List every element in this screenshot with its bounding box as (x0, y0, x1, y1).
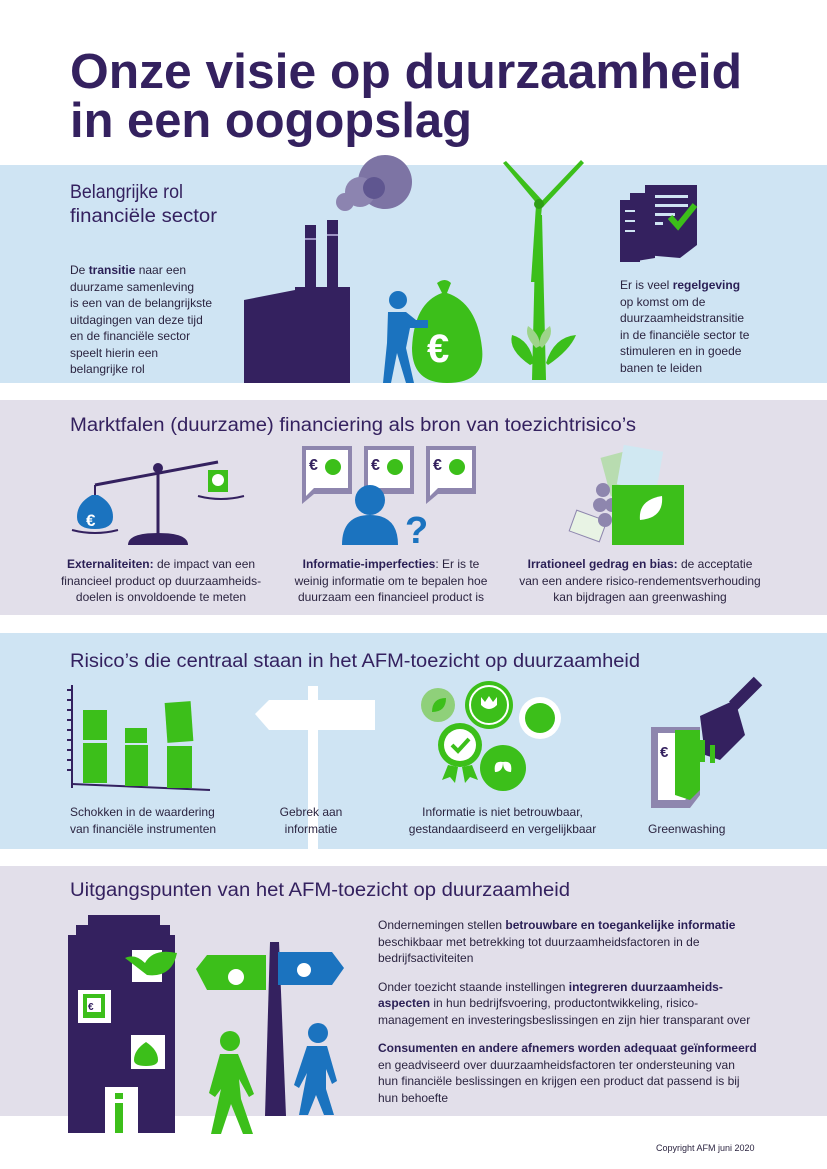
caption: irrationeel gedrag: Irrationeel gedrag en bias: de acceptatie (528, 557, 752, 571)
heading: section 1 (70, 182, 218, 227)
icon: greenwashing brush (651, 677, 762, 808)
heading: section 2: Marktfalen (duurzame) financiering als bron van toezichtrisico’s (70, 415, 636, 436)
title: in een oogopslag (70, 94, 472, 148)
text: section 4 principles: Ondernemingen stellen betrouwbare en toegankelijke informatie (378, 918, 735, 932)
caption: greenwashing: Greenwashing (648, 822, 725, 836)
icon: person pushing money bag (383, 280, 482, 383)
text: section 4 principles: Consumenten en andere afnemers worden adequaat geïnformeerd (378, 1041, 757, 1055)
icon: blank signpost (255, 686, 375, 849)
icon: greenwashing brush: € (660, 744, 669, 761)
icon: factory with smoke (244, 155, 412, 383)
band: section 2 background (0, 400, 827, 615)
icon: balance scale: € (86, 511, 96, 530)
text: section 4 principles: aspecten in hun bedrijfsvoering, productontwikkeling, risico- (378, 996, 698, 1010)
caption: schokken: van financiële instrumenten (70, 822, 216, 836)
band: section 1 background (0, 165, 827, 383)
text: section 1 left: en de financiële sector (70, 329, 190, 343)
caption: irrationeel gedrag: kan bijdragen aan greenwashing (553, 590, 727, 604)
text: section 4 principles: bedrijfsactiviteiten (378, 951, 473, 965)
caption: gebrek aan informatie: Gebrek aan (280, 805, 342, 819)
caption: informatie-imperfecties (294, 557, 487, 604)
caption: informatie-imperfecties: duurzaam een financieel product is (298, 590, 484, 604)
band: section 3 background (0, 633, 827, 849)
text: section 1 left: De transitie naar een (70, 263, 186, 277)
caption: irrationeel gedrag (519, 557, 761, 604)
text: section 1 left: speelt hierin een (70, 346, 158, 360)
text: section 4 principles: hun financiële beslissingen en krijgen een product dat passend is bij (378, 1074, 740, 1088)
title: Onze visie op duurzaamheid (70, 45, 742, 99)
icon: regulation documents with check (620, 185, 697, 262)
icon: wind turbine with plant (503, 160, 584, 380)
text: section 1 left: uitdagingen van deze tijd (70, 312, 203, 326)
text: section 1 left: duurzame samenleving (70, 280, 194, 294)
text: section 1 right: duurzaamheidstransitie (620, 311, 744, 325)
text: section 1 right: banen te leiden (620, 360, 702, 374)
icon: sustainability badges (421, 681, 561, 791)
text: section 4 principles: Onder toezicht staande instellingen integreren duurzaamheids- (378, 980, 723, 994)
text: section 1 right: in de financiële sector te (620, 328, 749, 342)
band: section 4 background (0, 866, 827, 1116)
text: section 4 principles: en geadviseerd over duurzaamheidsfactoren ter ondersteuning van (378, 1058, 735, 1072)
caption: externaliteiten (61, 557, 261, 604)
text: section 1 right: op komst om de (620, 294, 705, 308)
caption: irrationeel gedrag: van een andere risico-rendementsverhouding (519, 574, 761, 588)
icon: building with icons: € (88, 1002, 94, 1013)
icon: building with icons (68, 915, 177, 1133)
icon: money and green bag (569, 445, 684, 545)
icon: documents with person and question mark: € (433, 457, 442, 474)
text: section 4 principles: management en investeringsbeslissingen en zijn hier transparant over (378, 1012, 750, 1026)
caption: externaliteiten: financieel product op duurzaamheids- (61, 574, 261, 588)
icon: person pushing money bag: € (427, 327, 449, 371)
text: section 1 left: belangrijke rol (70, 362, 145, 376)
icon: documents with person and question mark: € (371, 457, 380, 474)
icon: signpost with two directions (196, 942, 344, 1116)
text: section 1 right: stimuleren en in goede (620, 344, 741, 358)
copyright: Copyright AFM juni 2020 (656, 1143, 755, 1153)
heading: section 1: financiële sector (70, 206, 218, 227)
text: section 4 principles: hun behoefte (378, 1090, 448, 1104)
caption: externaliteiten: Externaliteiten: de impact van een (67, 557, 255, 571)
title (70, 45, 742, 148)
caption: externaliteiten: doelen is onvoldoende te meten (76, 590, 246, 604)
caption: informatie niet betrouwbaar (409, 805, 596, 836)
caption: gebrek aan informatie (280, 805, 342, 836)
text: section 4 principles (378, 918, 757, 1104)
text: section 1 left (70, 263, 212, 376)
icon: documents with person and question mark (302, 446, 476, 552)
text: section 1 left: is een van de belangrijkste (70, 296, 212, 310)
caption: informatie niet betrouwbaar: gestandaardiseerd en vergelijkbaar (409, 822, 596, 836)
icon: documents with person and question mark: € (309, 457, 318, 474)
icon: walking people (209, 1023, 337, 1134)
bar chart (67, 685, 210, 790)
caption: schokken (70, 805, 216, 836)
text: section 1 right (620, 278, 749, 374)
icon: balance scale (72, 462, 244, 545)
icon: documents with person and question mark: ? (405, 510, 428, 552)
caption: informatie-imperfecties: weinig informatie om te bepalen hoe (295, 574, 487, 588)
heading: section 1: Belangrijke rol (70, 182, 183, 203)
heading: section 4: Uitgangspunten van het AFM-toezicht op duurzaamheid (70, 880, 570, 901)
text: section 4 principles: beschikbaar met betrekking tot duurzaamheidsfactoren in de (378, 934, 700, 948)
caption: schokken: Schokken in de waardering (70, 805, 215, 819)
caption: informatie-imperfecties: Informatie-imperfecties: Er is te (303, 557, 479, 571)
caption: gebrek aan informatie: informatie (285, 822, 337, 836)
text: section 1 right: Er is veel regelgeving (620, 278, 740, 292)
caption: informatie niet betrouwbaar: Informatie is niet betrouwbaar, (422, 805, 583, 819)
heading: section 3: Risico’s die centraal staan in het AFM-toezicht op duurzaamheid (70, 651, 640, 672)
